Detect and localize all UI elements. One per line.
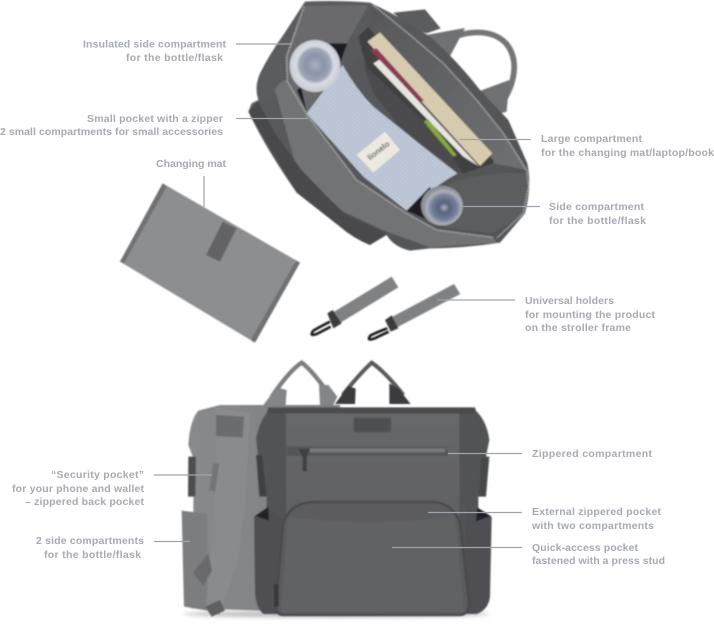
left side pocket	[254, 507, 287, 614]
top seam	[267, 407, 477, 413]
external zippered pocket	[276, 502, 469, 615]
blanket label	[357, 132, 400, 173]
front bag centre panel	[286, 411, 459, 612]
front bag body	[256, 410, 489, 613]
right interior flap	[368, 5, 527, 170]
left clips of front bag	[256, 455, 267, 497]
left clips	[188, 457, 196, 497]
back bag body	[188, 405, 340, 613]
two closed bags front and back	[182, 363, 492, 617]
callout: universal holders: for mounting the product	[525, 309, 656, 321]
callout: universal holders	[437, 295, 656, 334]
callout: security pocket: – zippered back pocket	[25, 496, 144, 508]
callout: small pocket: Small pocket with a zipper	[87, 113, 223, 125]
callout: two side compartments	[36, 535, 190, 561]
front pocket panel	[275, 80, 497, 247]
mat edge left	[120, 183, 167, 263]
back bag handle	[263, 363, 337, 405]
open bag top view	[248, 1, 529, 251]
book compartment pocket	[358, 27, 493, 173]
side compartment floor	[443, 173, 527, 233]
callout: universal holders: on the stroller frame	[525, 322, 631, 334]
top strap	[393, 9, 441, 33]
interior lining	[285, 5, 368, 113]
second stroller holder	[369, 284, 460, 339]
shoulder strap	[206, 407, 250, 615]
callout: security pocket: for your phone and wallet	[12, 483, 144, 495]
green page strip	[423, 119, 457, 157]
book pages	[373, 59, 478, 166]
strap loop	[193, 553, 212, 586]
callout: insulated side compartment: Insulated side compartment	[83, 38, 226, 50]
pocket zipper pull	[274, 584, 279, 607]
knitted blanket	[307, 65, 457, 211]
strap adjuster	[205, 600, 225, 617]
callout: small pocket: 2 small compartments for small accessories	[0, 126, 223, 138]
book	[367, 32, 492, 166]
mat fastening tab	[206, 222, 237, 262]
callout: changing mat	[156, 158, 226, 207]
callout: two side compartments: 2 side compartments	[36, 535, 144, 547]
first stroller holder	[312, 277, 398, 335]
callout: insulated side compartment	[83, 38, 292, 64]
back bag side pocket	[182, 511, 207, 611]
callout: external zippered pocket	[428, 506, 662, 532]
callout: large compartment: Large compartment	[541, 133, 642, 145]
bottom dark shadow	[407, 187, 443, 227]
callout: quick-access pocket	[392, 542, 665, 567]
callout: large compartment: for the changing mat/laptop/book	[541, 147, 714, 159]
strap webbing	[216, 415, 244, 437]
mesh pocket front	[363, 63, 462, 173]
brand patch	[354, 418, 391, 432]
callout: small pocket	[0, 113, 308, 138]
callout: universal holders: Universal holders	[525, 295, 614, 307]
dark compartment shadow	[297, 43, 347, 112]
callout: side compartment: for the bottle/flask	[549, 215, 646, 227]
callout: security pocket: “Security pocket”	[51, 469, 144, 481]
right clips	[478, 457, 489, 497]
callout: side compartment: Side compartment	[549, 201, 644, 213]
callout: two side compartments: for the bottle/flask	[44, 549, 141, 561]
callout: side compartment	[463, 201, 646, 227]
callout: quick-access pocket: Quick-access pocket	[532, 542, 638, 554]
front bag handle	[335, 363, 411, 404]
outer side pocket	[248, 102, 387, 245]
bottle in insulated pocket	[290, 40, 340, 92]
bag outer shell	[248, 1, 529, 251]
magenta page strip	[370, 48, 424, 102]
zipper compartment	[287, 447, 447, 471]
callout: large compartment	[460, 133, 714, 159]
callout: security pocket	[12, 469, 212, 508]
callout: insulated side compartment: for the bottle/flask	[126, 52, 223, 64]
mat body	[120, 183, 300, 343]
right side pocket	[462, 507, 492, 614]
mat edge right	[251, 261, 300, 343]
bag handle	[426, 28, 514, 115]
bottle in side pocket	[421, 186, 463, 226]
changing mat	[120, 183, 460, 343]
side pocket openings	[255, 507, 491, 521]
quick access pocket	[281, 516, 464, 613]
ground shadow	[183, 611, 490, 617]
callout: external zippered pocket: with two compartments	[531, 520, 654, 532]
blanket label: lionelo	[366, 139, 392, 162]
back zipper pull	[209, 463, 219, 492]
callout: quick-access pocket: fastened with a press stud	[532, 555, 665, 567]
callout: zippered compartment: Zippered compartment	[532, 448, 652, 460]
callout: changing mat: Changing mat	[156, 158, 226, 170]
callout: external zippered pocket: External zippered pocket	[532, 506, 662, 518]
zipper trims	[287, 5, 528, 238]
